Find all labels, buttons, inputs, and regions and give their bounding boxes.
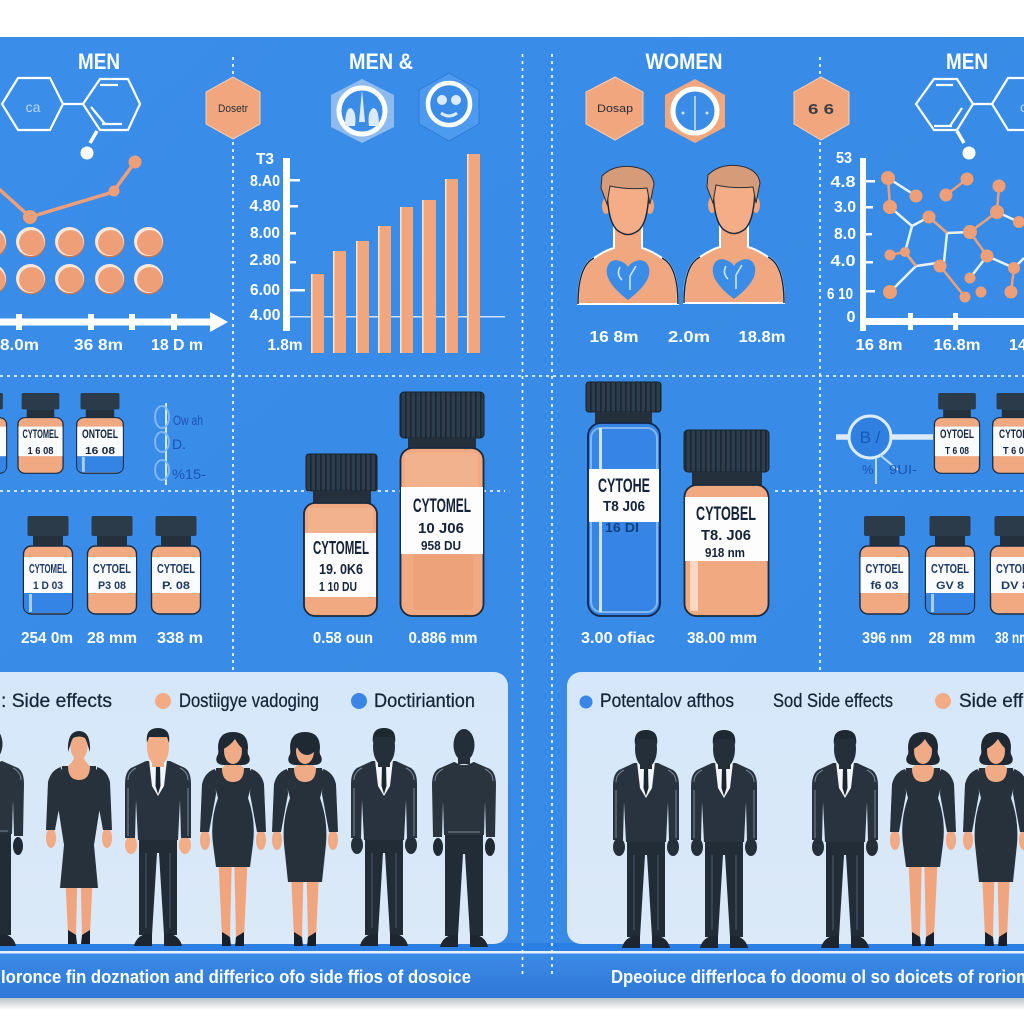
big bottle D: 918 nm — [705, 545, 745, 560]
bar chart: 8.00 — [250, 225, 280, 242]
panel: side effects right — [567, 672, 1024, 948]
big bottle labels right: 3.00 ofiac — [581, 630, 655, 647]
row 2 small bottles right: CYTOEL — [931, 561, 969, 576]
arrow axis left — [0, 312, 228, 332]
figures left — [0, 728, 496, 947]
heading: MEN left: MEN — [78, 49, 120, 74]
row 2 small bottles left — [24, 516, 200, 614]
row 2 labels left: 254 0m — [21, 630, 73, 647]
legend right — [580, 691, 1024, 712]
icon: orange hexagon 3 — [794, 77, 849, 140]
row 1 small bottles left: 1 6 08 — [28, 446, 54, 457]
bottom shadow — [0, 998, 1024, 1010]
row 2 small bottles left: P. 08 — [162, 580, 190, 592]
big bottle labels right — [581, 630, 757, 647]
people with hearts — [578, 165, 784, 304]
row 1 small bottles left: CYTOMEL — [22, 427, 58, 441]
row 2 small bottles right: GV 8 — [936, 580, 964, 592]
big bottle C blue: 16 DI — [605, 520, 639, 535]
icon: molecule left: ca — [26, 99, 41, 115]
row 2 small bottles left: P3 08 — [98, 580, 126, 592]
row 2 labels left: 338 m — [157, 630, 203, 647]
icon: orange hexagon 3: 6 6 — [808, 101, 834, 118]
bottom banner — [0, 943, 1024, 998]
big bottle labels left: 0.58 oun — [313, 630, 373, 647]
row 2 small bottles right: f6 03 — [870, 580, 898, 592]
icon: peach hexagon clock — [665, 79, 725, 143]
figures right — [613, 730, 1024, 948]
row 2 small bottles left: CYTOEL — [157, 561, 195, 576]
icon: orange hexagon 1: Dosetr — [218, 103, 248, 115]
molecule scatter chart: 4.8 — [830, 174, 856, 191]
heading: MEN and: MEN & — [349, 49, 413, 74]
big bottle C blue — [586, 382, 661, 616]
heading: MEN right: MEN — [946, 49, 988, 74]
bar chart: 4.00 — [250, 307, 281, 324]
row 1 small bottles right: OYTOEL — [940, 427, 974, 441]
big bottle B: 10 J06 — [418, 520, 464, 537]
woman 1 — [46, 731, 112, 944]
person 2 — [684, 165, 784, 303]
big bottle D: CYTOBEL — [696, 504, 756, 525]
callout: left dose key — [155, 403, 206, 485]
legend left: : Side effects — [1, 691, 112, 712]
legend left — [1, 691, 475, 712]
row 2 labels right: 28 mm — [928, 630, 976, 647]
big bottle C blue: T8 J06 — [603, 498, 645, 515]
big bottle labels left — [313, 630, 478, 647]
women axis labels — [590, 329, 786, 346]
row 1 small bottles left: ONTOEL — [82, 427, 118, 441]
callout: left dose key: Ow ah — [173, 412, 203, 428]
women axis labels: 2.0m — [668, 329, 710, 346]
row 2 labels left: 28 mm — [87, 630, 137, 647]
molecule scatter chart: 16.8m — [934, 337, 980, 354]
row 2 small bottles left: CYTOMEL — [29, 561, 67, 576]
bar chart: T3 — [256, 151, 274, 168]
person 1 — [578, 166, 678, 304]
callout: right magnifier: 9UI- — [889, 462, 917, 477]
icon: orange hexagon 1 — [206, 77, 260, 139]
row 1 small bottles right: T 6 08 — [945, 446, 969, 457]
row 2 labels right — [862, 630, 1024, 647]
row 1 small bottles right — [934, 393, 1024, 473]
bar chart: 1.8m — [268, 337, 302, 354]
molecule scatter chart — [827, 150, 1024, 354]
big bottle A: 1 10 DU — [319, 579, 357, 594]
big bottle A — [304, 454, 377, 616]
legend right: Sod Side effects — [773, 691, 893, 712]
axis labels left: 18 D m — [151, 337, 203, 354]
callout: right magnifier: B / — [860, 428, 881, 447]
woman 5 — [963, 732, 1024, 946]
heading: WOMEN: WOMEN — [646, 49, 722, 74]
axis labels left: 8.0m — [0, 337, 39, 354]
big bottle C blue: CYTOHE — [598, 476, 650, 497]
row 2 labels left — [21, 630, 203, 647]
bar chart: 8.A0 — [250, 173, 280, 190]
row 1 small bottles left — [0, 393, 123, 473]
molecule scatter chart: 0 — [846, 309, 856, 326]
big bottle labels right: 38.00 mm — [687, 630, 757, 647]
axis labels left — [0, 337, 203, 354]
molecule scatter chart: 16 8m — [856, 337, 902, 354]
bar chart — [250, 151, 505, 354]
icon: orange hexagon 2: Dosap — [597, 103, 633, 115]
woman 4 — [890, 732, 956, 946]
legend right: Potentalov afthos — [600, 691, 734, 712]
molecule scatter chart: 4.0 — [830, 253, 856, 270]
bar chart: 2.80 — [250, 252, 281, 269]
icon: light hexagon gauge — [331, 79, 394, 143]
women axis labels: 18.8m — [738, 329, 786, 346]
callout: left dose key: D. — [172, 436, 186, 452]
row 2 small bottles left: 1 D 03 — [33, 580, 63, 592]
icon: blue hexagon face — [419, 73, 479, 141]
icon: molecule left — [2, 78, 140, 160]
big bottle B — [400, 392, 484, 616]
big bottle D — [684, 430, 769, 616]
molecule scatter chart: 53 — [836, 150, 852, 167]
molecule scatter chart: 3.0 — [834, 199, 856, 216]
woman 2 — [200, 732, 266, 946]
pills — [0, 227, 164, 294]
callout: right magnifier — [836, 416, 933, 484]
women axis labels: 16 8m — [590, 329, 638, 346]
panel: side effects left — [0, 672, 508, 947]
row 1 small bottles left: 16 08 — [85, 446, 116, 457]
big bottle B: 958 DU — [421, 538, 461, 553]
big bottle A: 19. 0K6 — [319, 561, 363, 578]
big bottle D: T8. J06 — [701, 527, 751, 544]
icon: orange hexagon 2 — [586, 77, 643, 140]
row 2 small bottles left: CYTOEL — [93, 561, 131, 576]
row 2 labels right: 396 nm — [862, 630, 912, 647]
row 2 small bottles right — [860, 516, 1024, 614]
bar chart: 4.80 — [250, 198, 281, 215]
legend left: Dostiigye vadoging — [179, 691, 319, 712]
big bottle B: CYTOMEL — [413, 496, 471, 517]
callout: right magnifier: % — [862, 462, 874, 477]
big bottle labels left: 0.886 mm — [408, 630, 478, 647]
banner text left: Ioronce fin doznation and differico ofo side ffios of dosoice — [1, 967, 471, 987]
bar chart: 6.00 — [250, 282, 280, 299]
row 2 small bottles right: CYTOEL — [866, 561, 904, 576]
molecule scatter chart: 6 10 — [827, 286, 853, 303]
molecule scatter chart: 8.0 — [834, 226, 856, 243]
legend right: Side eff — [959, 691, 1024, 712]
legend left: Doctiriantion — [374, 691, 475, 712]
axis labels left: 36 8m — [74, 337, 123, 354]
icon: molecule right — [916, 78, 1024, 160]
line chart left — [0, 156, 142, 224]
big bottle A: CYTOMEL — [313, 538, 369, 558]
callout: left dose key: %15- — [172, 466, 206, 482]
woman 3 — [272, 732, 338, 946]
